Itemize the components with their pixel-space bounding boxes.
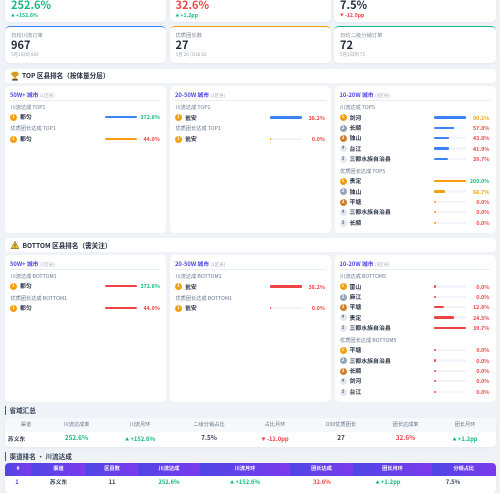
panel: TOP 20-50W cities: 优质团长达成 TOP1 bbox=[176, 124, 221, 132]
table: provincial summary: ▲ +152.6% bbox=[125, 434, 155, 442]
panel: TOP 10-20W cities: 独山 bbox=[350, 133, 361, 142]
panel: TOP 50W+ cities: 44.0% bbox=[144, 135, 160, 143]
table: provincial summary: 27 bbox=[337, 433, 345, 442]
panel: TOP 20-50W cities: 瓮安 bbox=[185, 134, 197, 143]
table: provincial summary: 苏义东 bbox=[8, 434, 25, 442]
panel: TOP 10-20W cities: 5 bbox=[342, 156, 344, 162]
panel: BOTTOM 20-50W cities: 优质团长达成 BOTTOM1 bbox=[176, 294, 232, 302]
panel: TOP 10-20W cities: 贵定 bbox=[350, 176, 361, 185]
heading: channel ranking bbox=[5, 452, 205, 460]
table: provincial summary: D30优质团长 bbox=[326, 421, 356, 428]
panel: TOP 10-20W cities: 长顺 bbox=[350, 218, 361, 227]
table: provincial summary: ▲ +1.2pp bbox=[452, 434, 478, 442]
panel: TOP 20-50W cities: 川流达成 TOP1 bbox=[176, 104, 210, 110]
panel: BOTTOM 50W+ cities: 都匀 bbox=[20, 281, 32, 290]
panel: TOP 50W+ cities: 372.6% bbox=[140, 113, 160, 121]
panel: BOTTOM 50W+ cities: 都匀 bbox=[20, 303, 32, 312]
panel: BOTTOM 10-20W cities: 3 bbox=[342, 304, 344, 310]
table: channel ranking: 11 bbox=[109, 477, 115, 486]
panel: TOP 20-50W cities: 1 bbox=[177, 114, 180, 120]
panel: TOP 50W+ cities: 都匀 bbox=[20, 134, 32, 143]
panel: BOTTOM 10-20W cities: 麻江 bbox=[350, 292, 361, 301]
KPI card: secondary distribution orders: 日均二级分销订单 bbox=[340, 30, 382, 38]
panel: BOTTOM 10-20W cities: 3 bbox=[342, 368, 344, 374]
panel: BOTTOM 10-20W cities: 0.0% bbox=[476, 377, 490, 385]
panel: BOTTOM 10-20W cities: 川流达成 BOTTOM5 bbox=[340, 272, 386, 280]
table: channel ranking: 渠道 bbox=[53, 465, 64, 472]
table: channel ranking: 7.5% bbox=[446, 477, 460, 486]
panel: TOP 10-20W cities: 43.8% bbox=[473, 134, 490, 142]
KPI card: flow achievement bbox=[5, 0, 166, 22]
panel: BOTTOM 10-20W cities: 剑河 bbox=[350, 376, 361, 385]
table: provincial summary: 川流月环 bbox=[130, 421, 150, 428]
table: channel ranking: 团长月环 bbox=[382, 465, 403, 472]
panel: TOP 10-20W cities: 200.0% bbox=[470, 177, 490, 185]
panel: BOTTOM 10-20W cities: 1 bbox=[342, 283, 344, 289]
KPI card: daily flow orders bbox=[5, 26, 166, 63]
panel: TOP 10-20W cities: 66.7% bbox=[473, 188, 490, 196]
panel: BOTTOM 20-50W cities: 38.2% bbox=[308, 282, 325, 290]
KPI card: daily flow orders: 967 bbox=[11, 36, 30, 52]
panel: TOP 20-50W cities: 20-50W 城市 (1区县) bbox=[175, 90, 225, 99]
panel: BOTTOM 10-20W cities: 平塘 bbox=[350, 345, 361, 354]
panel: BOTTOM 10-20W cities: 三都水族自治县 bbox=[350, 356, 391, 364]
panel: BOTTOM 20-50W cities: 瓮安 bbox=[185, 303, 197, 312]
panel: BOTTOM 10-20W cities: 4 bbox=[342, 378, 344, 384]
KPI card: daily flow orders: 日均川流订单 bbox=[11, 30, 43, 38]
panel: TOP 50W+ cities: 1 bbox=[12, 136, 15, 142]
panel: TOP 10-20W cities: 10-20W 城市 (9区县) bbox=[340, 90, 390, 99]
panel: BOTTOM 50W+ cities: 50W+ 城市 (1区县) bbox=[10, 259, 55, 268]
panel: TOP 50W+ cities: 优质团长达成 TOP1 bbox=[10, 124, 56, 132]
table: channel ranking: ▲ +152.6% bbox=[230, 477, 260, 486]
panel: TOP 10-20W cities: 4 bbox=[342, 145, 344, 151]
panel: TOP 10-20W cities: 0.0% bbox=[476, 198, 490, 206]
panel: BOTTOM 20-50W cities: 瓮安 bbox=[185, 282, 197, 290]
panel: BOTTOM 10-20W cities: 优质团长达成 BOTTOM5 bbox=[340, 336, 396, 344]
panel: TOP 50W+ cities: 都匀 bbox=[20, 112, 32, 121]
panel: TOP 20-50W cities: 38.2% bbox=[308, 114, 325, 122]
panel: BOTTOM 10-20W cities: 贵定 bbox=[350, 312, 361, 322]
heading: BOTTOM ranking: BOTTOM 区县排名（需关注） bbox=[22, 240, 111, 250]
table: channel ranking: 苏义东 bbox=[50, 477, 67, 486]
KPI card: quality leaders: 27 bbox=[176, 36, 188, 52]
table: channel ranking: 1 bbox=[15, 477, 19, 486]
table: channel ranking: 分销占比 bbox=[453, 465, 474, 472]
table: provincial summary: 二级分销占比 bbox=[193, 421, 225, 428]
KPI card: flow achievement: ▲ +152.6% bbox=[11, 12, 38, 18]
panel: BOTTOM 10-20W cities: 三都水族自治县 bbox=[350, 323, 391, 332]
KPI card: quality leaders bbox=[170, 26, 330, 63]
KPI card: quality leaders: 优质团长数 bbox=[176, 30, 202, 38]
KPI card: secondary distribution orders bbox=[334, 26, 496, 63]
panel: BOTTOM 10-20W cities: 10-20W 城市 (9区县) bbox=[340, 259, 390, 268]
table: provincial summary: 团长达成率 bbox=[393, 421, 418, 428]
panel: BOTTOM 10-20W cities: 平塘 bbox=[350, 302, 361, 311]
KPI card: distribution share bbox=[334, 0, 496, 22]
panel: BOTTOM 20-50W cities: 川流达成 BOTTOM1 bbox=[176, 272, 222, 280]
panel: TOP 10-20W cities: 三都水族自治县 bbox=[350, 207, 391, 216]
panel: BOTTOM 10-20W cities: 0.0% bbox=[476, 346, 490, 354]
panel: BOTTOM 50W+ cities: 川流达成 BOTTOM1 bbox=[10, 272, 57, 280]
KPI card: secondary distribution orders: 72 bbox=[340, 36, 353, 52]
heading: TOP ranking bbox=[5, 68, 496, 82]
table: channel ranking: ▲ +1.2pp bbox=[375, 477, 401, 486]
panel: TOP 10-20W cities: 3 bbox=[342, 134, 344, 140]
panel: BOTTOM 10-20W cities: 台江 bbox=[350, 387, 361, 396]
panel: TOP 10-20W cities: 0.0% bbox=[476, 208, 490, 216]
KPI card: leader achievement: ▲ +1.2pp bbox=[176, 12, 198, 18]
panel: TOP 20-50W cities: 1 bbox=[177, 136, 180, 142]
panel: BOTTOM 10-20W cities: 0.0% bbox=[476, 388, 490, 396]
icon: warning triangle bbox=[11, 241, 19, 249]
panel: BOTTOM 10-20W cities: 5 bbox=[342, 388, 344, 394]
panel: TOP 10-20W cities: 41.9% bbox=[473, 144, 490, 152]
table: provincial summary: 占比月环 bbox=[265, 421, 285, 428]
panel: BOTTOM 50W+ cities: 44.0% bbox=[144, 304, 160, 312]
panel: TOP 20-50W cities: 瓮安 bbox=[185, 112, 197, 122]
KPI card: quality leaders: 5月 26 | D36 82 bbox=[176, 52, 206, 58]
panel: BOTTOM 10-20W cities: 雷山 bbox=[350, 282, 361, 290]
table: channel ranking: 252.6% bbox=[158, 477, 180, 486]
panel: TOP 10-20W cities: 0.0% bbox=[476, 219, 490, 227]
table: provincial summary bbox=[5, 418, 496, 446]
table: channel ranking: 团长达成 bbox=[311, 465, 332, 472]
heading: provincial summary: 省域汇总 bbox=[10, 405, 36, 415]
panel: TOP 10-20W cities: 5 bbox=[342, 220, 344, 226]
table: channel ranking: 川流达成 bbox=[159, 465, 179, 472]
panel: TOP 50W+ cities: 川流达成 TOP1 bbox=[10, 104, 45, 110]
panel: TOP 20-50W cities: 0.0% bbox=[312, 135, 325, 143]
heading: TOP ranking: TOP 区县排名（按体量分层） bbox=[22, 70, 109, 80]
panel: TOP 50W+ cities: 1 bbox=[12, 114, 15, 120]
panel: BOTTOM 10-20W cities: 0.0% bbox=[476, 282, 490, 290]
KPI card: distribution share: ▼ -12.0pp bbox=[340, 12, 364, 18]
panel: TOP 10-20W cities: 川流达成 TOP5 bbox=[340, 104, 375, 110]
table: provincial summary: 32.6% bbox=[396, 433, 415, 442]
panel: TOP 10-20W cities bbox=[334, 86, 496, 233]
table: channel ranking bbox=[5, 463, 496, 493]
table: channel ranking: 川流月环 bbox=[235, 465, 255, 472]
KPI card: secondary distribution orders: 5月1日均 75 bbox=[340, 52, 365, 58]
panel: TOP 10-20W cities: 2 bbox=[342, 124, 344, 130]
panel: BOTTOM 20-50W cities: 1 bbox=[177, 283, 180, 289]
panel: TOP 10-20W cities: 独山 bbox=[350, 186, 361, 196]
heading: BOTTOM ranking bbox=[5, 238, 496, 252]
table: provincial summary: 川流达成率 bbox=[64, 421, 89, 428]
panel: TOP 10-20W cities: 39.7% bbox=[473, 155, 490, 163]
panel: TOP 50W+ cities bbox=[5, 86, 166, 233]
panel: BOTTOM 10-20W cities: 长顺 bbox=[350, 366, 361, 375]
panel: TOP 10-20W cities: 台江 bbox=[350, 144, 361, 152]
panel: BOTTOM 50W+ cities bbox=[5, 255, 166, 402]
panel: TOP 10-20W cities: 4 bbox=[342, 208, 344, 214]
panel: TOP 10-20W cities: 剑河 bbox=[350, 112, 361, 122]
panel: BOTTOM 10-20W cities: 24.5% bbox=[473, 314, 490, 322]
panel: TOP 10-20W cities: 90.1% bbox=[473, 114, 490, 122]
panel: TOP 10-20W cities: 3 bbox=[342, 198, 344, 204]
panel: TOP 10-20W cities: 1 bbox=[342, 178, 344, 184]
heading: channel ranking: 渠道排名 · 川流达成 bbox=[10, 450, 72, 460]
table: provincial summary: 团长月环 bbox=[455, 421, 475, 428]
panel: TOP 50W+ cities: 50W+ 城市 (1区县) bbox=[10, 90, 55, 99]
panel: BOTTOM 10-20W cities: 12.6% bbox=[473, 303, 490, 311]
icon: trophy bbox=[11, 72, 19, 81]
panel: TOP 10-20W cities: 长顺 bbox=[350, 123, 361, 132]
panel: BOTTOM 50W+ cities: 372.6% bbox=[140, 282, 160, 290]
table: provincial summary: 252.6% bbox=[65, 433, 88, 442]
panel: BOTTOM 50W+ cities: 优质团长达成 BOTTOM1 bbox=[10, 294, 67, 302]
panel: BOTTOM 20-50W cities: 0.0% bbox=[312, 304, 325, 312]
table: provincial summary: 渠道 bbox=[21, 421, 31, 428]
panel: TOP 10-20W cities: 三都水族自治县 bbox=[350, 154, 391, 163]
panel: TOP 10-20W cities: 1 bbox=[342, 114, 344, 120]
table: channel ranking: 区县数 bbox=[104, 465, 120, 472]
KPI card: leader achievement bbox=[170, 0, 330, 22]
KPI card: daily flow orders: 5月1日均 883 bbox=[11, 52, 39, 58]
table: provincial summary: ▼ -12.0pp bbox=[261, 434, 289, 442]
panel: BOTTOM 20-50W cities: 20-50W 城市 (1区县) bbox=[175, 259, 225, 268]
table: provincial summary: 7.5% bbox=[201, 433, 217, 442]
panel: TOP 10-20W cities: 57.8% bbox=[473, 124, 490, 132]
panel: BOTTOM 10-20W cities: 1 bbox=[342, 346, 344, 352]
panel: BOTTOM 20-50W cities: 1 bbox=[177, 304, 180, 310]
panel: BOTTOM 10-20W cities: 39.7% bbox=[473, 324, 490, 332]
panel: BOTTOM 10-20W cities: 4 bbox=[342, 314, 344, 320]
panel: TOP 10-20W cities: 2 bbox=[342, 188, 344, 194]
panel: BOTTOM 10-20W cities: 0.0% bbox=[476, 356, 490, 364]
panel: BOTTOM 10-20W cities bbox=[334, 255, 496, 402]
panel: BOTTOM 50W+ cities: 1 bbox=[12, 282, 15, 288]
heading: provincial summary bbox=[5, 406, 205, 415]
panel: BOTTOM 10-20W cities: 2 bbox=[342, 294, 344, 300]
panel: BOTTOM 10-20W cities: 0.0% bbox=[476, 293, 490, 301]
panel: BOTTOM 50W+ cities: 1 bbox=[12, 304, 15, 310]
panel: BOTTOM 10-20W cities: 0.0% bbox=[476, 367, 490, 375]
panel: BOTTOM 10-20W cities: 5 bbox=[342, 324, 344, 330]
table: channel ranking: # bbox=[16, 465, 20, 472]
panel: TOP 10-20W cities: 优质团长达成 TOP5 bbox=[340, 168, 385, 174]
panel: BOTTOM 10-20W cities: 2 bbox=[342, 357, 344, 363]
panel: TOP 10-20W cities: 平塘 bbox=[350, 197, 361, 206]
table: channel ranking: 32.6% bbox=[313, 477, 331, 486]
panel: TOP 20-50W cities bbox=[170, 86, 330, 233]
panel: BOTTOM 20-50W cities bbox=[170, 255, 330, 402]
